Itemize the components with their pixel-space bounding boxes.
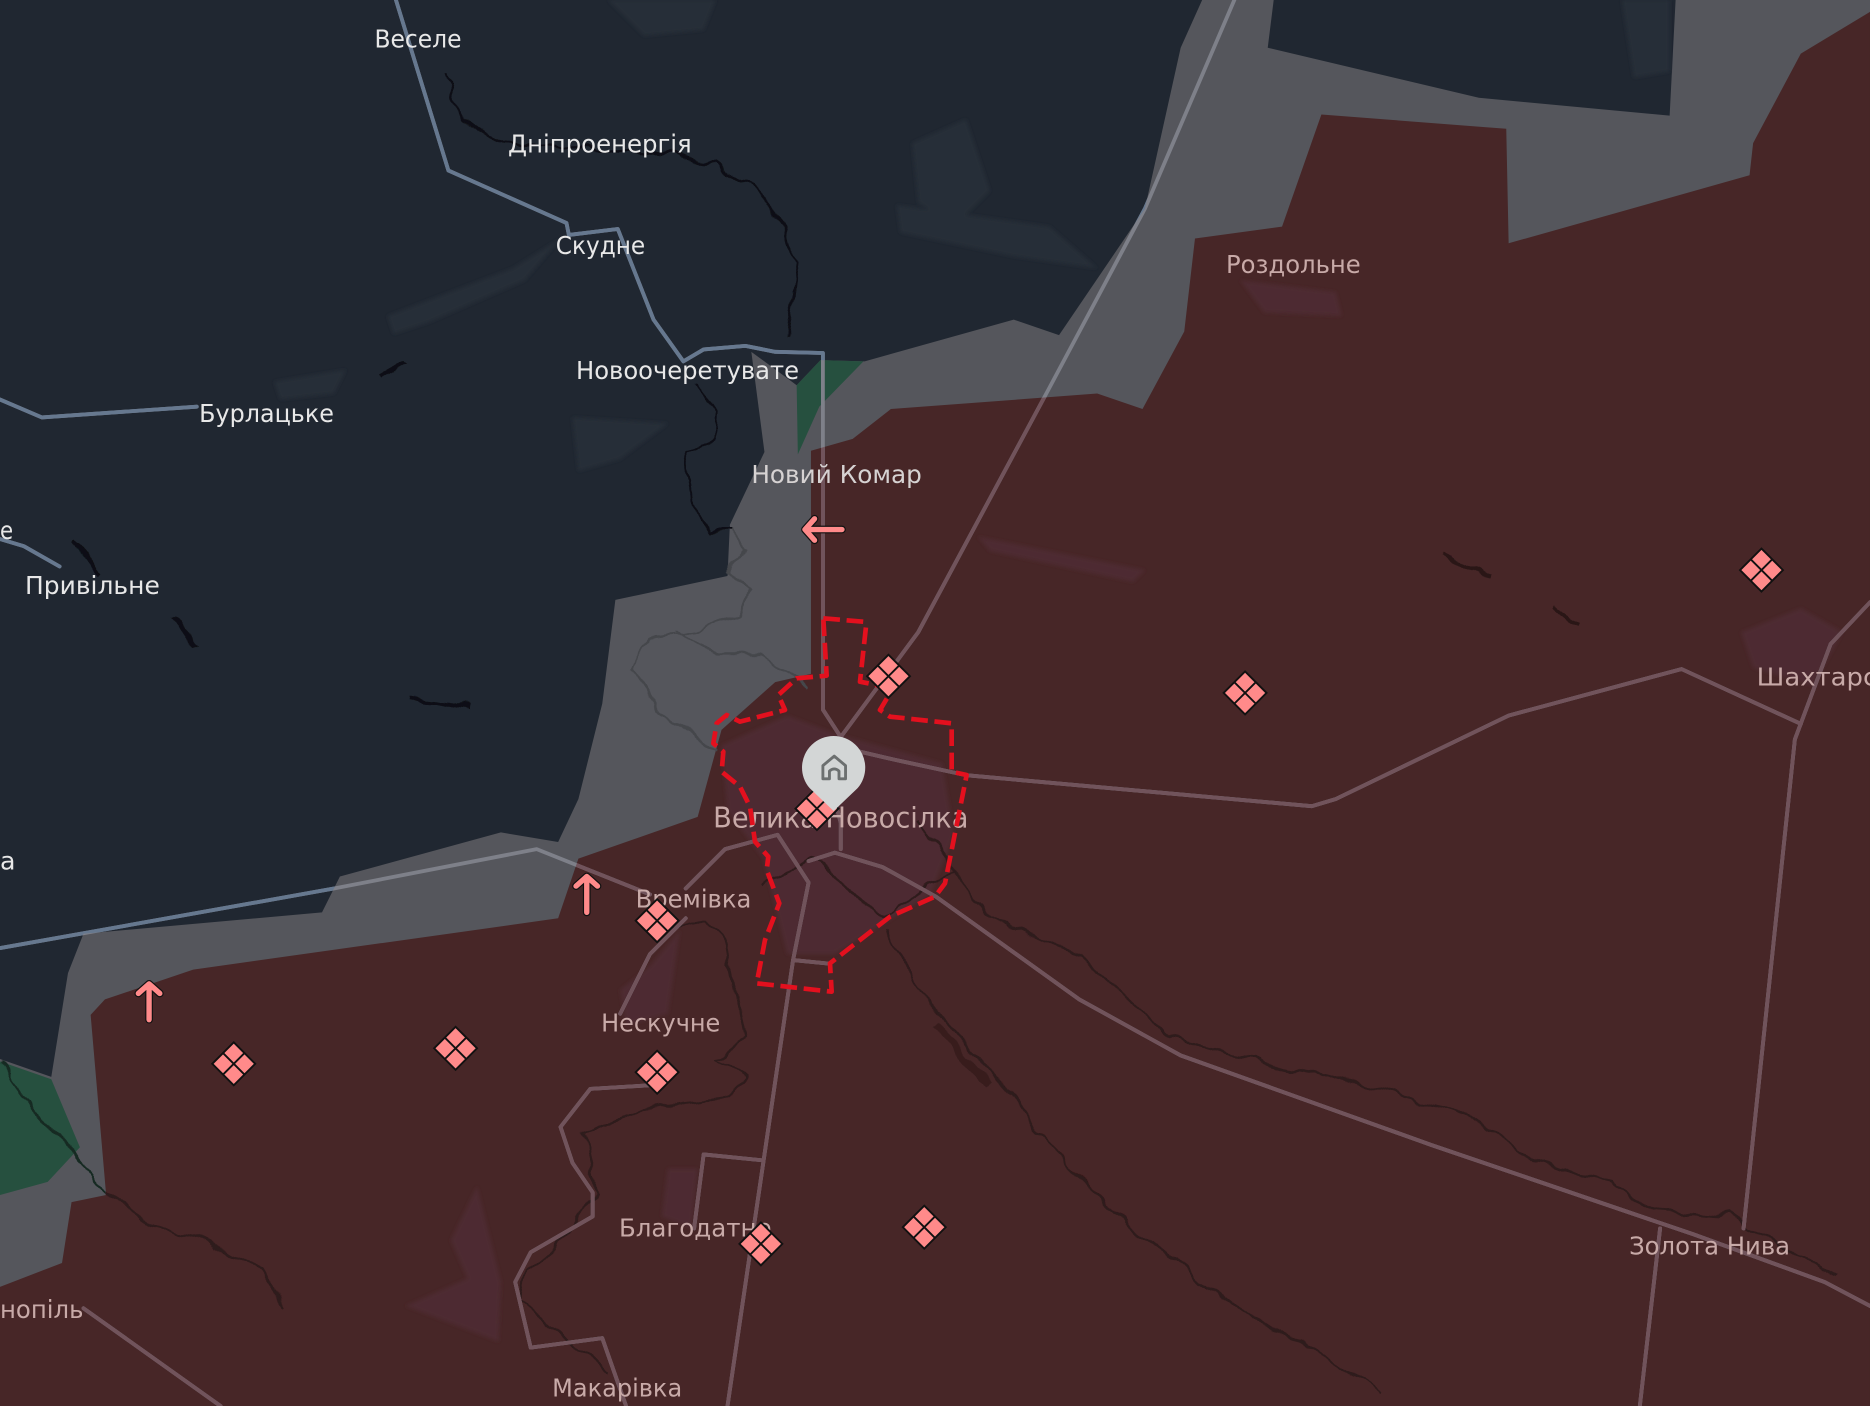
place labels on occupied territory: Роздольне xyxy=(1226,250,1361,279)
marker xyxy=(1740,549,1783,592)
place labels on occupied territory: Времівка xyxy=(636,885,751,914)
terrain patches xyxy=(274,0,1670,471)
place labels on free territory: Веселе xyxy=(374,25,462,54)
location pin xyxy=(802,736,865,811)
attack markers xyxy=(212,549,1783,1265)
advance arrows xyxy=(138,519,842,1020)
place labels on occupied territory: Благодатне xyxy=(619,1214,772,1243)
arrow up centre xyxy=(576,877,597,912)
town areas xyxy=(405,280,1843,1342)
place labels on free territory: е xyxy=(0,516,13,545)
marker xyxy=(636,1051,679,1094)
place labels on occupied territory: нопіль xyxy=(0,1295,83,1324)
navy territory xyxy=(0,0,1676,1077)
dashed encirclement outline xyxy=(713,618,967,992)
marker xyxy=(636,899,679,942)
arrow up west xyxy=(138,984,160,1020)
marker xyxy=(739,1222,782,1265)
icon: home xyxy=(823,756,846,779)
place labels on free territory: Новий Комар xyxy=(751,460,922,489)
place labels on free territory: Дніпроенергія xyxy=(508,130,692,159)
place labels on free territory: Бурлацьке xyxy=(199,399,334,428)
place labels on occupied territory: Макарівка xyxy=(552,1374,682,1403)
place labels on occupied territory: Велика Новосілка xyxy=(713,801,968,835)
place labels on free territory: Новоочеретувате xyxy=(576,356,799,385)
place labels on free territory xyxy=(0,25,922,875)
marker xyxy=(1224,671,1267,714)
marker xyxy=(212,1042,255,1085)
place labels on occupied territory: Золота Нива xyxy=(1629,1232,1790,1261)
green zone west xyxy=(0,1061,80,1195)
marker xyxy=(867,655,910,698)
marker xyxy=(903,1206,946,1249)
marker xyxy=(434,1027,477,1070)
arrow left xyxy=(805,519,842,540)
place labels on free territory: Скудне xyxy=(556,231,645,260)
place labels on free territory: Привільне xyxy=(25,571,160,600)
marker xyxy=(795,787,838,830)
green zone north xyxy=(797,360,863,454)
place labels on occupied territory: Нескучне xyxy=(601,1009,720,1038)
place labels on free territory: а xyxy=(0,846,16,875)
